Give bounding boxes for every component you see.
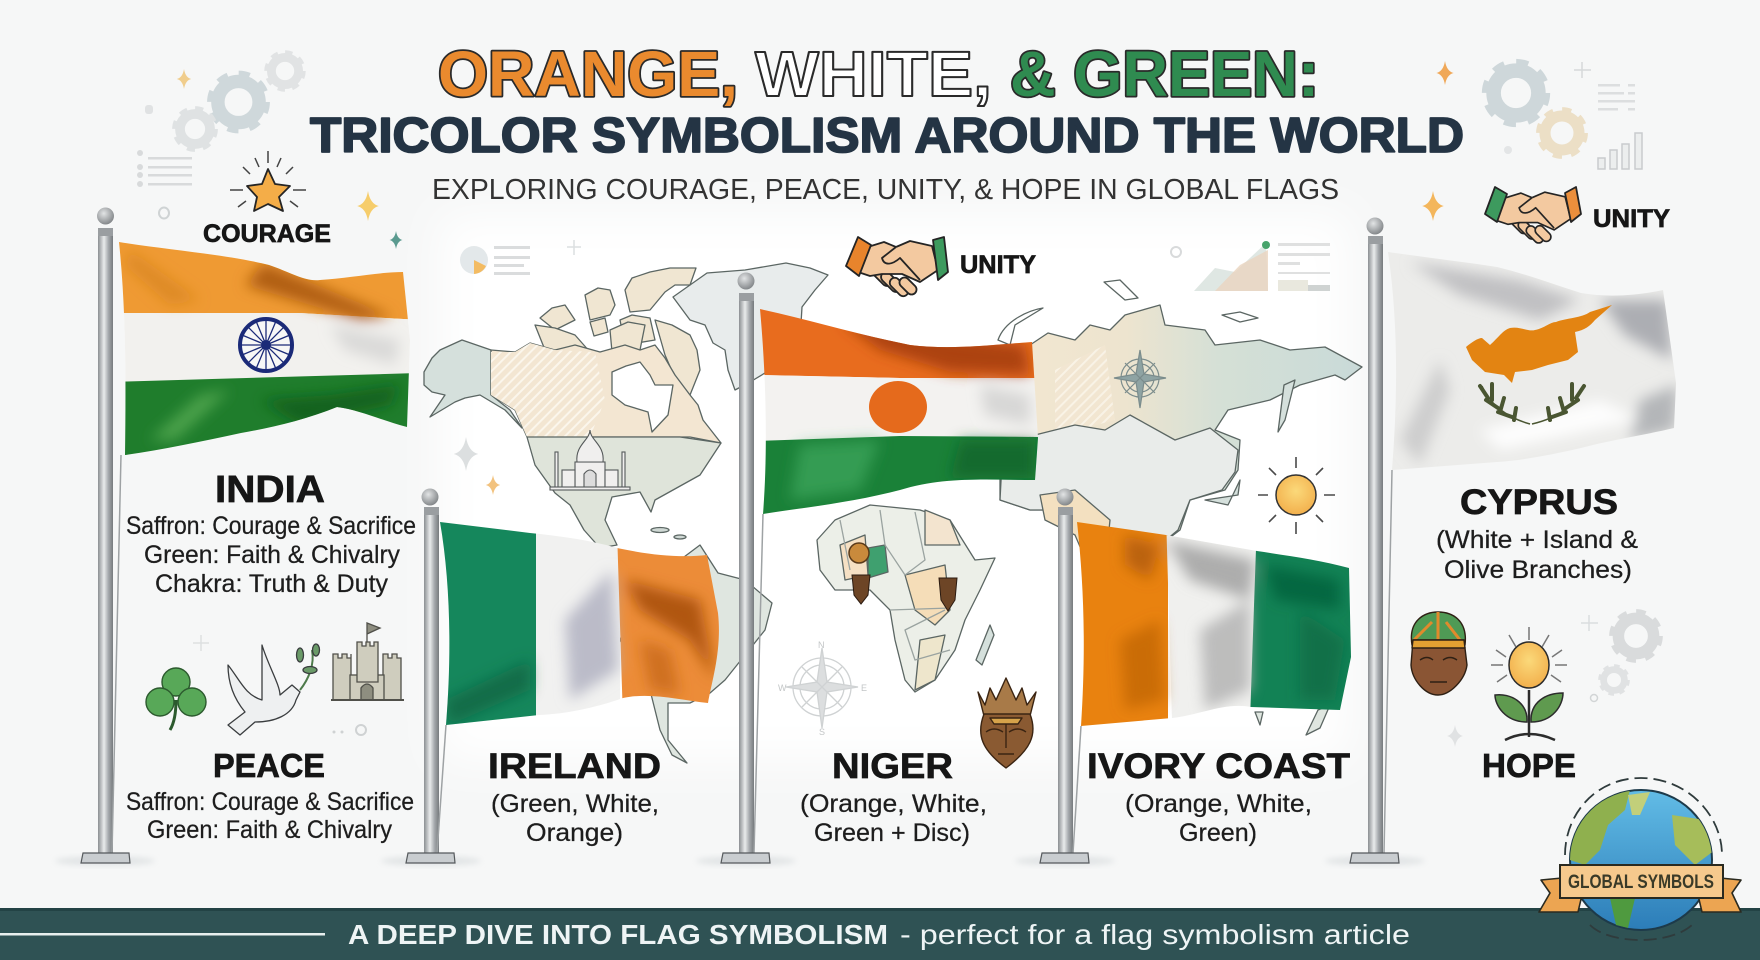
gears [1600,612,1660,694]
footer rule [0,933,325,936]
ring [1590,694,1598,702]
dashed ring [1565,778,1722,940]
africa highlighted countries [840,510,960,690]
top left decorations [137,53,303,218]
ring [1171,247,1181,257]
plus [1574,62,1591,78]
gears [175,53,303,149]
label: unity right: UNITY [1593,205,1670,233]
alaska [424,340,522,428]
olive branches [1480,384,1584,424]
russia hatch [1055,345,1115,432]
icon: mask niger [978,678,1036,768]
india text [126,512,416,598]
block: cyprus [1436,483,1638,584]
ireland text: Orange) [526,819,623,847]
green stripe [763,436,1038,514]
gears [1486,63,1585,156]
india text: Chakra: Truth & Duty [155,570,388,598]
footer bold text: A DEEP DIVE INTO FLAG SYMBOLISM [348,919,888,950]
title word green: & GREEN: [1010,38,1319,110]
world map [424,263,1362,763]
white band [1166,535,1256,718]
block: ireland [488,747,661,847]
cyprus text: Olive Branches) [1444,556,1632,584]
cyprus heading: CYPRUS [1460,483,1618,522]
ireland text [491,790,659,847]
eurasia [1000,305,1362,545]
madagascar [976,625,994,665]
icon: hope sun plant [1491,627,1567,740]
icon: compass lower: W [778,683,787,693]
icon: courage star [230,151,306,211]
ribbon [1560,865,1723,898]
southern remnants [1255,705,1330,735]
ivory coast heading: IVORY COAST [1087,747,1350,786]
scandinavia and islands [998,280,1258,345]
peace heading: PEACE [213,747,325,784]
ribbon text: GLOBAL SYMBOLS [1568,872,1714,893]
cyprus text: (White + Island & [1436,526,1638,554]
icon: taj mahal [550,430,630,490]
small mask east [939,578,957,611]
niger text [800,790,987,847]
peace text [126,788,414,844]
shading [1120,535,1345,710]
block: niger [800,747,987,847]
medallion [849,543,869,563]
block: peace [126,747,414,844]
cyprus island [1466,305,1612,383]
white band [536,534,620,716]
label: courage: COURAGE [203,220,331,248]
ivory coast text: (Orange, White, [1125,790,1312,818]
text lines [1598,84,1635,110]
japan and sakhalin [1205,380,1295,505]
orange band [1077,522,1168,726]
canada hatch [491,343,605,437]
top right decorations [1436,61,1642,169]
dot [1504,146,1512,154]
africa [817,505,995,692]
flag: india [119,242,410,455]
sparkle [1447,725,1463,747]
arctic islands [535,268,700,395]
peace text: Saffron: Courage & Sacrifice [126,788,414,816]
footer regular text: - perfect for a flag symbolism article [900,919,1410,950]
icon: handshake right [1485,187,1581,245]
niger heading: NIGER [832,747,953,786]
icon: compass lower: S [819,727,825,737]
shading [1400,262,1678,465]
sparkle orange [1422,191,1444,221]
green band [440,522,536,725]
pie icon [460,246,530,275]
ireland text: (Green, White, [491,790,659,818]
india text: Saffron: Courage & Sacrifice [126,512,416,540]
cyprus text [1436,526,1638,584]
sparkle teal [390,231,402,249]
peace text: Green: Faith & Chivalry [147,816,392,844]
orange band [618,548,719,703]
icon: castle [331,623,404,700]
title [310,38,1464,163]
icon: africa masks [849,543,957,611]
ring [159,208,169,218]
niger text: (Orange, White, [800,790,987,818]
icon: compass lower [778,640,867,737]
icon: shamrock [146,668,206,730]
usa and mexico [527,437,721,548]
shading [790,320,1035,500]
ireland heading: IRELAND [488,747,661,786]
white stripe [755,375,1045,441]
icon: compass lower: N [818,640,824,650]
line chart [1194,241,1330,291]
canada [491,343,721,443]
flag: ireland [440,522,719,725]
ivory coast text [1125,790,1312,847]
shading [445,570,715,725]
white stripe [110,313,420,382]
green stripe [125,373,409,455]
small mask west [852,575,870,604]
south america [620,545,772,763]
icon: hope mask [1411,612,1467,695]
india heading: INDIA [215,469,325,511]
icon: compass lower: E [861,683,867,693]
flag: cyprus [1388,252,1676,470]
icon: dove [228,644,320,735]
icon: handshake center [846,237,948,298]
pole: cyprus [1325,218,1425,866]
greenland [673,263,828,390]
icon: ashoka chakra [240,319,292,371]
pole: india [55,208,155,866]
globe [1570,790,1715,930]
green band [1250,550,1351,710]
title line 2: TRICOLOR SYMBOLISM AROUND THE WORLD [310,109,1464,163]
hudson bay [612,362,673,432]
title word orange: ORANGE, [438,38,738,110]
flag: niger [760,309,1038,514]
block: ivory coast [1087,747,1350,847]
icon: compass over asia [1114,350,1166,408]
saffron stripe [119,242,408,320]
ribbon tails [1539,878,1741,912]
plus [1581,615,1598,631]
central and south asia [1000,415,1238,545]
orange stripe [760,309,1034,378]
block: india [126,469,416,598]
sparkle gray [454,437,478,471]
badge: global symbols [1539,778,1741,940]
decor: plus and ring [193,635,366,735]
plus [567,240,581,255]
niger text: Green + Disc) [814,819,970,847]
sparkle yellow [357,191,379,221]
pole: ivory coast [1015,488,1115,866]
bar icon [1598,133,1642,169]
subtitle: EXPLORING COURAGE, PEACE, UNITY, & HOPE IN GLOBAL FLAGS [432,174,1339,206]
shading [125,250,400,440]
list icon [137,150,192,187]
label: hope: HOPE [1482,747,1576,784]
caribbean [651,528,686,539]
africa borders [840,510,950,660]
india text: Green: Faith & Chivalry [144,541,400,569]
niger disc [869,381,927,433]
label: unity center: UNITY [960,251,1036,279]
dot [145,105,153,114]
pole: ireland [381,488,481,866]
hope decorations [1447,612,1660,747]
pole: niger [696,272,796,866]
title word white: WHITE, [755,38,992,110]
sparkle [1436,61,1454,85]
sparkle small orange [486,475,500,495]
sparkle [177,69,191,89]
icon: map sun [1258,457,1335,534]
ivory coast text: Green) [1179,819,1257,847]
flag: ivory coast [1077,522,1351,726]
map decorations [454,240,1330,495]
footer bar [0,908,1760,960]
